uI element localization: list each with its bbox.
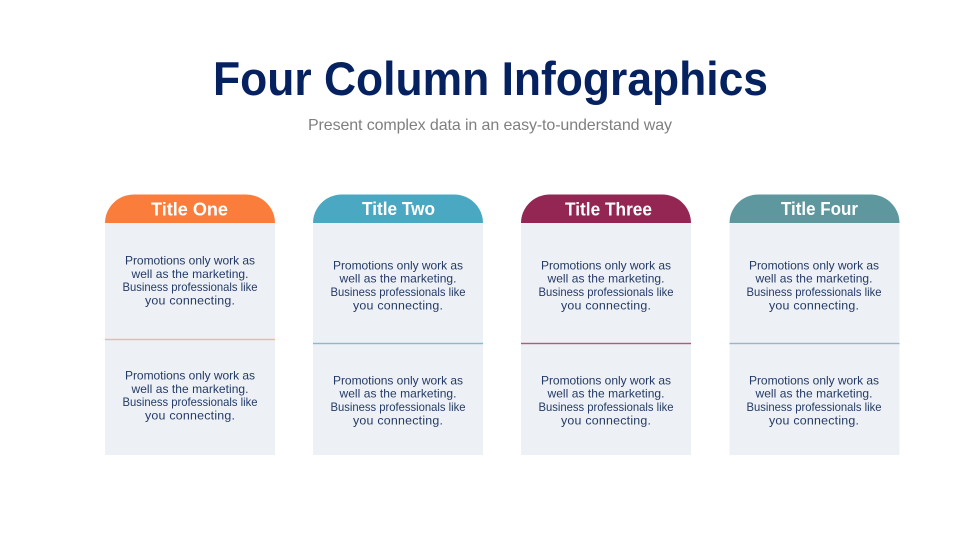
text block: upper: Promotions only work as xyxy=(125,254,255,268)
text block: upper: Business professionals like xyxy=(746,285,882,299)
header: title three xyxy=(521,194,691,223)
text block: lower: well as the marketing. xyxy=(754,387,872,401)
text block: upper: well as the marketing. xyxy=(546,272,664,286)
text block: lower: well as the marketing. xyxy=(546,387,664,401)
text block: lower: well as the marketing. xyxy=(130,382,248,396)
text block: lower: Business professionals like xyxy=(538,400,674,414)
header: title two: Title Two xyxy=(362,198,435,219)
title: Four Column Infographics xyxy=(213,52,768,105)
text block: lower: Business professionals like xyxy=(746,400,882,414)
text block: lower xyxy=(746,373,882,428)
text block: lower: Business professionals like xyxy=(122,395,258,409)
header: title one: Title One xyxy=(151,198,228,220)
text block: upper xyxy=(330,258,466,312)
text block: upper: well as the marketing. xyxy=(754,272,872,286)
text block: lower: well as the marketing. xyxy=(338,387,456,401)
text block: lower: Promotions only work as xyxy=(333,373,463,387)
text block: upper: well as the marketing. xyxy=(338,272,456,286)
text block: lower: you connecting. xyxy=(145,409,235,423)
text block: lower xyxy=(538,373,674,428)
text block: lower: you connecting. xyxy=(769,414,859,428)
text block: upper xyxy=(122,254,258,308)
header: title four: Title Four xyxy=(781,198,858,219)
text block: upper: you connecting. xyxy=(145,294,235,308)
text block: lower: Promotions only work as xyxy=(125,368,255,382)
text block: upper: Business professionals like xyxy=(122,280,258,294)
text block: upper: well as the marketing. xyxy=(130,267,248,281)
panel: column one xyxy=(105,194,275,455)
text block: upper: Promotions only work as xyxy=(749,258,879,272)
panel: column three xyxy=(521,194,691,455)
text block: upper: you connecting. xyxy=(769,298,859,312)
header: title three: Title Three xyxy=(565,198,652,220)
text block: lower: Promotions only work as xyxy=(541,373,671,387)
text block: upper: Business professionals like xyxy=(538,285,674,299)
text block: upper: you connecting. xyxy=(561,298,651,312)
text block: upper: Promotions only work as xyxy=(333,258,463,272)
text block: lower: Promotions only work as xyxy=(749,373,879,387)
text block: lower: you connecting. xyxy=(561,414,651,428)
panel: column two xyxy=(313,194,483,455)
text block: lower: you connecting. xyxy=(353,414,443,428)
text block: upper xyxy=(746,258,882,312)
text block: upper: Promotions only work as xyxy=(541,258,671,272)
panel: column four xyxy=(730,194,900,455)
header: title one xyxy=(105,194,275,223)
text block: upper: you connecting. xyxy=(353,298,443,312)
text block: lower xyxy=(330,373,466,428)
subtitle: Present complex data in an easy-to-understand way xyxy=(308,117,672,134)
text block: upper xyxy=(538,258,674,312)
text block: lower: Business professionals like xyxy=(330,400,466,414)
header: title four xyxy=(730,194,900,223)
text block: lower xyxy=(122,368,258,423)
header: title two xyxy=(313,194,483,223)
text block: upper: Business professionals like xyxy=(330,285,466,299)
